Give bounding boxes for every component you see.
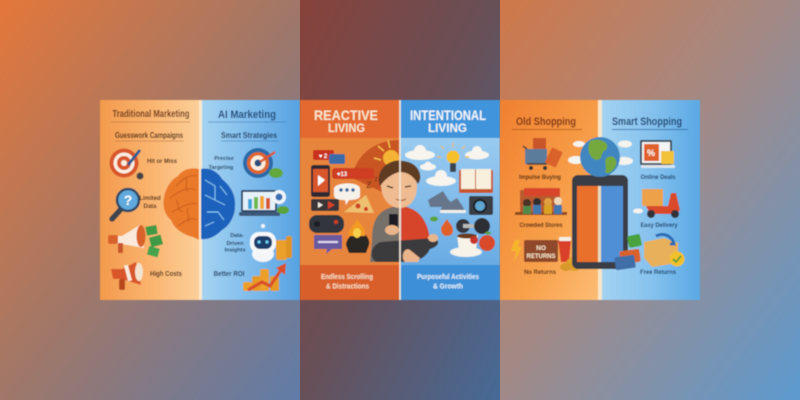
label: Hit or Miss: Hit or Miss: [147, 158, 177, 165]
icon: coins with rising arrow: [243, 263, 286, 291]
icon: shoes, camera, dumbbell: [428, 191, 493, 236]
illustration: child split meditating: [370, 161, 438, 262]
icon: target precise: [243, 148, 283, 178]
icon: target hit or miss: [110, 148, 144, 180]
caption: Endless Scrolling & Distractions: Endless Scrolling: [321, 272, 373, 281]
label: Precise Targeting: [209, 156, 234, 171]
caption: Purposeful Activities & Growth: Purposeful Activities: [417, 272, 479, 281]
heading: Intentional Living: [410, 107, 486, 135]
icon: magnifier with question mark: [112, 189, 139, 219]
subheading: Guesswork Campaigns: Guesswork Campaigns: [115, 130, 183, 140]
icon: social media and distractions: z: [374, 176, 378, 183]
label: Data-Driven Insights: Driven: [226, 241, 244, 247]
icon: globe with clouds: [568, 137, 633, 177]
icon: phone: [572, 175, 628, 269]
label: No Returns: No Returns: [524, 269, 556, 276]
label: Precise Targeting: Precise: [214, 156, 234, 162]
heading: Reactive Living: LIVING: [328, 121, 365, 135]
panel: reactive vs intentional living: [300, 100, 500, 300]
heading: Reactive Living: [314, 107, 378, 135]
icon: online deals laptop: %: [647, 148, 655, 158]
icon: megaphone with money: [108, 225, 163, 257]
icon: laptop chart with gear: [239, 190, 289, 216]
icon: clouds, bulb, book: [405, 143, 493, 193]
panel: old vs smart shopping: [500, 100, 700, 300]
label: Limited Data: Limited: [139, 196, 161, 202]
heading: Old Shopping: Old Shopping: [516, 116, 576, 128]
icon: magnifier with question mark: ?: [124, 192, 132, 208]
icon: no returns sign: NO: [536, 245, 546, 252]
icon: no returns sign: RETURNS: [526, 254, 556, 260]
label: Free Returns: Free Returns: [640, 269, 676, 276]
heading: AI Marketing: AI Marketing: [218, 109, 276, 121]
heading: Smart Shopping: Smart Shopping: [612, 116, 682, 128]
label: Data-Driven Insights: [224, 233, 246, 254]
icon: sun: [352, 140, 399, 200]
icon: crowded store: [515, 188, 567, 215]
label: Crowded Stores: Crowded Stores: [520, 222, 563, 229]
caption: Endless Scrolling & Distractions: & Distractions: [326, 282, 369, 290]
label: Data-Driven Insights: Data-: [230, 233, 244, 239]
label: Limited Data: [139, 196, 161, 210]
icon: shopping cart with sale tag: [523, 138, 563, 170]
label: Easy Delivery: Easy Delivery: [640, 222, 678, 229]
caption: Endless Scrolling & Distractions: [321, 272, 373, 290]
label: Limited Data: Data: [143, 204, 157, 210]
label: Impulse Buying: Impulse Buying: [519, 174, 561, 181]
icon: social media and distractions: Z: [366, 180, 372, 190]
heading: Traditional Marketing: Traditional Marketing: [112, 109, 190, 120]
label: Online Deals: Online Deals: [640, 174, 676, 181]
icon: returns box with check: [614, 234, 684, 270]
icon: megaphone high costs: [111, 262, 143, 290]
icon: coffee cup and apple: [450, 232, 495, 257]
caption: Purposeful Activities & Growth: [417, 272, 479, 290]
caption: Purposeful Activities & Growth: & Growth: [433, 282, 463, 290]
icon: social media and distractions: ♥ 2: [319, 154, 328, 160]
subheading: Smart Strategies: Smart Strategies: [221, 130, 277, 140]
icon: blue circuit brain half: [201, 169, 235, 239]
icon: robot with coins: [250, 224, 292, 262]
icon: orange brain half: [163, 168, 199, 240]
icon: social media and distractions: [309, 150, 378, 254]
heading: Intentional Living: INTENTIONAL: [410, 107, 486, 123]
label: Precise Targeting: Targeting: [209, 165, 233, 171]
label: High Costs: High Costs: [150, 269, 182, 278]
icon: online deals laptop: [640, 140, 675, 168]
icon: delivery scooter: [633, 189, 680, 218]
icon: no returns sign: [511, 237, 582, 271]
panel: marketing comparison: [100, 100, 300, 300]
heading: Intentional Living: LIVING: [428, 121, 467, 135]
label: Better ROI: Better ROI: [214, 271, 245, 278]
label: Data-Driven Insights: Insights: [224, 248, 246, 254]
heading: Reactive Living: REACTIVE: [314, 107, 378, 123]
icon: social media and distractions: ♥13: [337, 172, 348, 178]
